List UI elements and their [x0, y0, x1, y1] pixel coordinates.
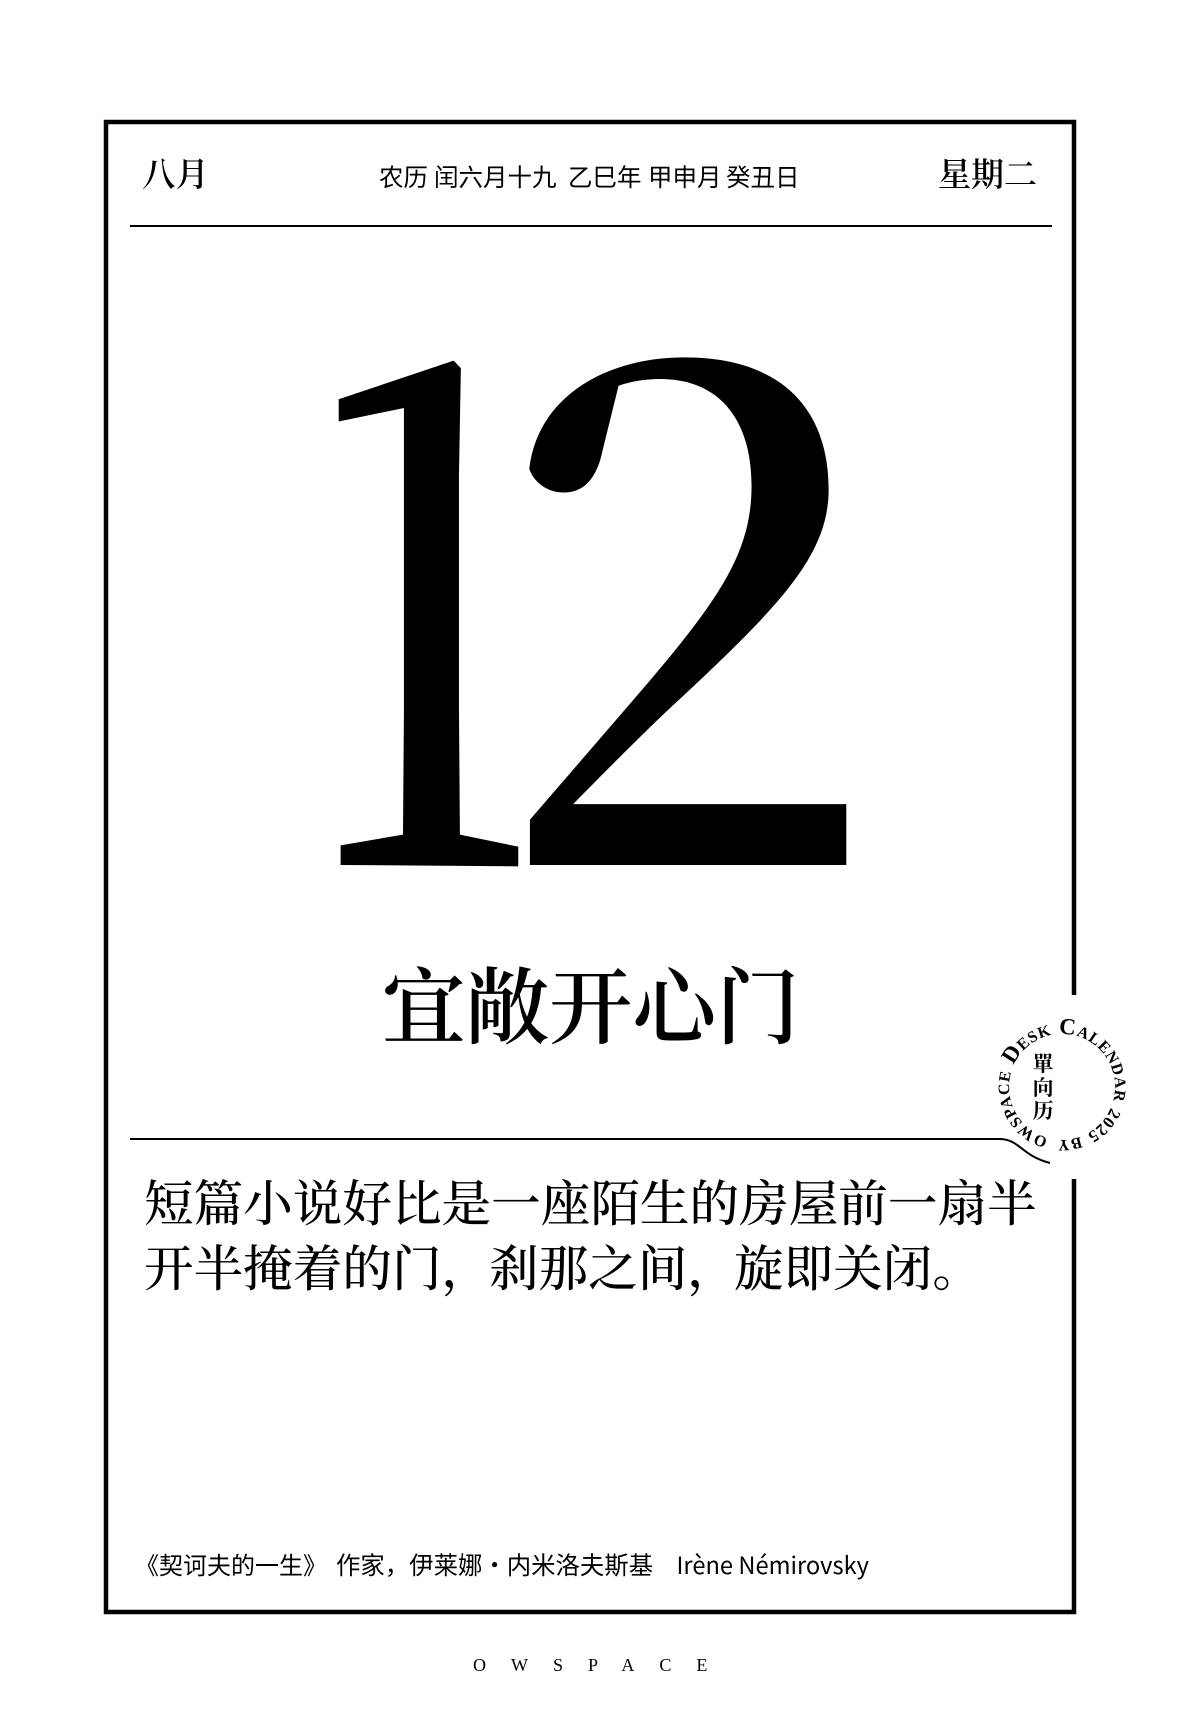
quote text: 开半掩着的门，: [144, 1230, 491, 1301]
header: lunar date: 闰六月十九: [434, 159, 556, 194]
source line: 《契诃夫的一生》: [135, 1546, 327, 1581]
quote text: [144, 1165, 1037, 1301]
header: weekday: 星期二: [938, 149, 1037, 196]
stamp centre text: 單: [1032, 1048, 1054, 1078]
footer brand: OWSPACE: [473, 1655, 732, 1675]
stamp centre text: 历: [1032, 1095, 1054, 1125]
calendar frame: [106, 122, 1074, 1612]
quote text: 刹那之间，: [489, 1230, 737, 1301]
round stamp: [998, 1019, 1126, 1150]
source line: Irène Némirovsky: [676, 1546, 869, 1581]
header rule: [130, 225, 1052, 227]
stamp centre text: 向: [1032, 1072, 1054, 1102]
divider rule with curve: [130, 1139, 1050, 1163]
quote text: 旋即关闭。: [734, 1230, 982, 1301]
source line: 作家，伊莱娜·内米洛夫斯基: [336, 1547, 653, 1582]
date number 12: [309, 88, 879, 1059]
source line: [135, 1546, 869, 1582]
header: month: 八月: [142, 147, 209, 196]
header: lunar date: 乙巳年: [568, 159, 642, 194]
header: lunar date: [379, 159, 800, 194]
header: lunar date: 癸丑日: [726, 159, 800, 194]
header: lunar date: 甲申月: [648, 159, 722, 194]
stamp ring text: owspace Desk Calendar 2025 by: [998, 1019, 1126, 1150]
header: lunar date: 农历: [379, 159, 428, 194]
stamp centre text: [1032, 1048, 1054, 1125]
date number 12: 2: [488, 88, 879, 1059]
quote text: 短篇小说好比是一座陌生的房屋前一扇半: [144, 1165, 1037, 1236]
daily motto: 宜敞开心门: [382, 941, 800, 1061]
date number 12: 1: [309, 88, 537, 1059]
